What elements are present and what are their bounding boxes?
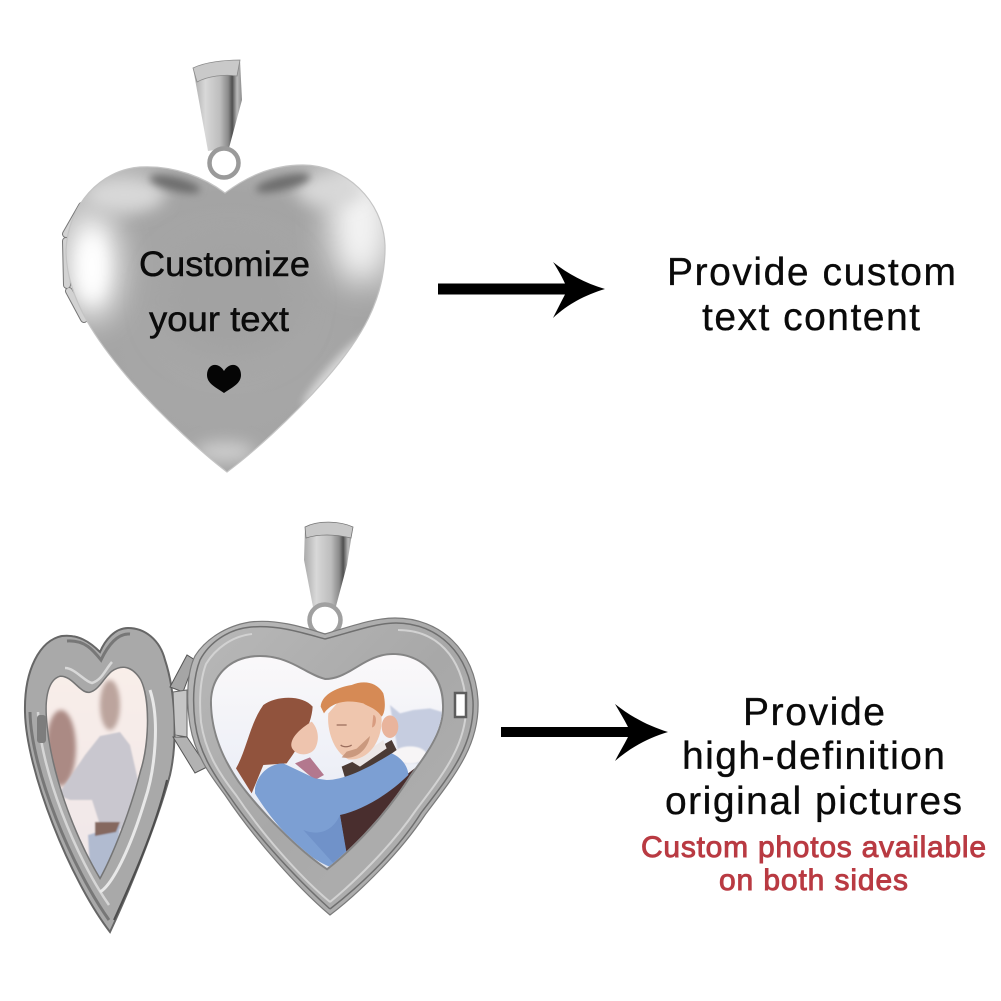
heading: provide custom text content: text content: [702, 296, 920, 339]
blue coat: [255, 753, 408, 867]
woman hair: [236, 698, 313, 793]
dark jacket of man: [340, 768, 416, 852]
icon: pendant ring: [210, 148, 238, 178]
heading: provide high-definition original pictures: original pictures: [665, 780, 962, 823]
heading: provide custom text content: Provide custom: [667, 251, 956, 294]
distant city: [390, 705, 447, 763]
note: custom photos on both sides: Custom photos available: [641, 831, 986, 864]
note: custom photos on both sides: on both sides: [719, 864, 908, 897]
man collar: [342, 740, 397, 777]
locket: closed heart with engraved text: [50, 60, 400, 480]
man eye and mouth: [337, 725, 352, 747]
man hand: [382, 715, 398, 738]
engraved text: second line: your text: [149, 299, 289, 339]
arrow: to picture instructions: [501, 704, 668, 761]
woman face: [291, 722, 318, 754]
panel: right frame of locket: [188, 618, 478, 915]
heart outline highlight: [66, 165, 385, 472]
man face and neck: [328, 698, 382, 760]
white scarf behind: [393, 746, 427, 764]
arrow: to custom text: [438, 262, 605, 318]
icon: open pendant ring: [310, 604, 340, 636]
icon: frame clasp slot: [455, 693, 466, 717]
heading: provide high-definition original pictures: high-definition: [682, 735, 945, 778]
heading: provide custom text content: [667, 251, 956, 339]
man beard: [342, 736, 370, 758]
icon: pendant bail: [193, 60, 242, 151]
photo frame rim: [212, 655, 442, 868]
icon: small black heart: [207, 365, 241, 393]
frame bevel edge: [194, 623, 473, 909]
photo: couple seen from behind: [46, 668, 147, 877]
man hair: [321, 682, 385, 717]
icon: open pendant bail: [304, 522, 353, 610]
heading: provide high-definition original pictures: Provide: [743, 691, 885, 734]
photo: couple embracing: [212, 655, 442, 868]
heart body: [68, 166, 384, 472]
engraved text: Customize your text: Customize: [139, 244, 310, 284]
panel: left door of locket: [25, 628, 175, 932]
heading: provide high-definition original pictures: [665, 691, 962, 823]
woman scarf: [295, 757, 324, 780]
note: custom photos on both sides: [641, 831, 986, 897]
icon: locket hinge: [170, 655, 207, 773]
icon: side hinge: [66, 206, 84, 319]
locket: open heart with photos: [25, 522, 478, 932]
